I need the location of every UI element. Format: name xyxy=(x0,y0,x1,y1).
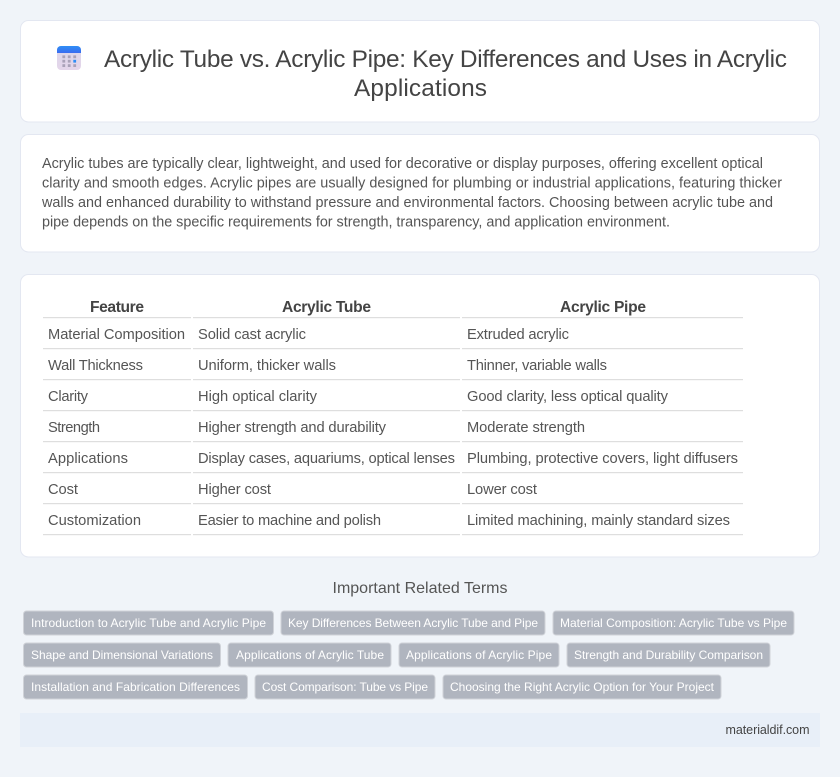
table row: customization: Easier to machine and polish xyxy=(198,513,381,529)
title: Applications xyxy=(354,75,487,102)
table row: applications: Applications xyxy=(48,451,128,467)
tag: Applications of Acrylic Tube xyxy=(236,648,384,662)
table row: material composition: Extruded acrylic xyxy=(467,327,569,343)
footer xyxy=(20,713,820,747)
tag: Choosing the Right Acrylic Option for Your Project xyxy=(450,680,715,694)
tag xyxy=(399,643,559,667)
table row: cost: Lower cost xyxy=(467,482,537,498)
tag xyxy=(255,675,435,699)
tag: Installation and Fabrication Differences xyxy=(31,680,240,694)
tag xyxy=(281,611,545,635)
title: Acrylic Tube vs. Acrylic Pipe: Key Differences and Uses in Acrylic xyxy=(104,46,787,73)
tag: Introduction to Acrylic Tube and Acrylic Pipe xyxy=(31,616,266,630)
icon: calendar xyxy=(57,46,81,70)
table row: strength: Strength xyxy=(48,420,100,436)
title xyxy=(104,46,787,102)
panel: introduction xyxy=(20,134,820,252)
tag xyxy=(24,643,220,667)
table row: strength: Higher strength and durability xyxy=(198,420,387,436)
table row: strength: Moderate strength xyxy=(467,420,585,436)
tag: Strength and Durability Comparison xyxy=(574,648,763,662)
tag xyxy=(567,643,770,667)
table row: material composition xyxy=(43,327,743,349)
table row: customization xyxy=(43,513,743,535)
tag xyxy=(443,675,721,699)
table row: wall thickness: Wall Thickness xyxy=(48,358,143,374)
table header row: Acrylic Tube xyxy=(282,299,371,316)
table row: customization: Customization xyxy=(48,513,141,529)
panel: comparison table xyxy=(20,274,820,557)
table row: cost: Cost xyxy=(48,482,78,498)
table header row: Feature xyxy=(90,299,144,316)
table header row: Acrylic Pipe xyxy=(560,299,646,316)
tag: Key Differences Between Acrylic Tube and Pipe xyxy=(288,616,538,630)
table row: wall thickness: Thinner, variable walls xyxy=(467,358,607,374)
table row: customization: Limited machining, mainly standard sizes xyxy=(467,513,730,529)
footer: materialdif.com xyxy=(726,723,810,737)
text block: introduction paragraph: clarity and smooth edges. Acrylic pipes are usually designed for plumbing or industrial applications, featuring thicker xyxy=(42,176,782,192)
table row: applications: Plumbing, protective covers, light diffusers xyxy=(467,451,738,467)
text block: introduction paragraph: pipe depends on the specific requirements for strength, transparency, and application environment. xyxy=(42,214,670,230)
text block: introduction paragraph: Acrylic tubes are typically clear, lightweight, and used for decorative or display purposes, offering excellent optical xyxy=(42,156,763,172)
tag: Applications of Acrylic Pipe xyxy=(406,648,552,662)
heading: important related terms: Important Related Terms xyxy=(332,580,508,597)
table header row xyxy=(43,299,743,318)
table row: cost xyxy=(43,482,743,504)
table row: material composition: Material Composition xyxy=(48,327,185,343)
table row: cost: Higher cost xyxy=(198,482,271,498)
panel: title header xyxy=(20,20,820,122)
tag xyxy=(24,611,274,635)
table row: clarity: Clarity xyxy=(48,389,89,405)
tag: Cost Comparison: Tube vs Pipe xyxy=(262,680,428,694)
panel: related term tags xyxy=(24,611,794,699)
table row: material composition: Solid cast acrylic xyxy=(198,327,306,343)
table row: clarity xyxy=(43,389,743,411)
table row: applications xyxy=(43,451,743,473)
table row: clarity: High optical clarity xyxy=(198,389,318,405)
text block: introduction paragraph: walls and enhanced durability to withstand pressure and environmental factors. Choosing between acrylic tube and xyxy=(41,195,773,211)
tag: Material Composition: Acrylic Tube vs Pipe xyxy=(560,616,787,630)
text block: introduction paragraph xyxy=(41,156,782,230)
tag: Shape and Dimensional Variations xyxy=(31,648,213,662)
tag xyxy=(553,611,794,635)
table row: clarity: Good clarity, less optical quality xyxy=(467,389,669,405)
table row: wall thickness: Uniform, thicker walls xyxy=(198,358,336,374)
table row: applications: Display cases, aquariums, optical lenses xyxy=(198,451,455,467)
tag xyxy=(24,675,248,699)
tag xyxy=(228,643,391,667)
table row: strength xyxy=(43,420,743,442)
table row: wall thickness xyxy=(43,358,743,380)
